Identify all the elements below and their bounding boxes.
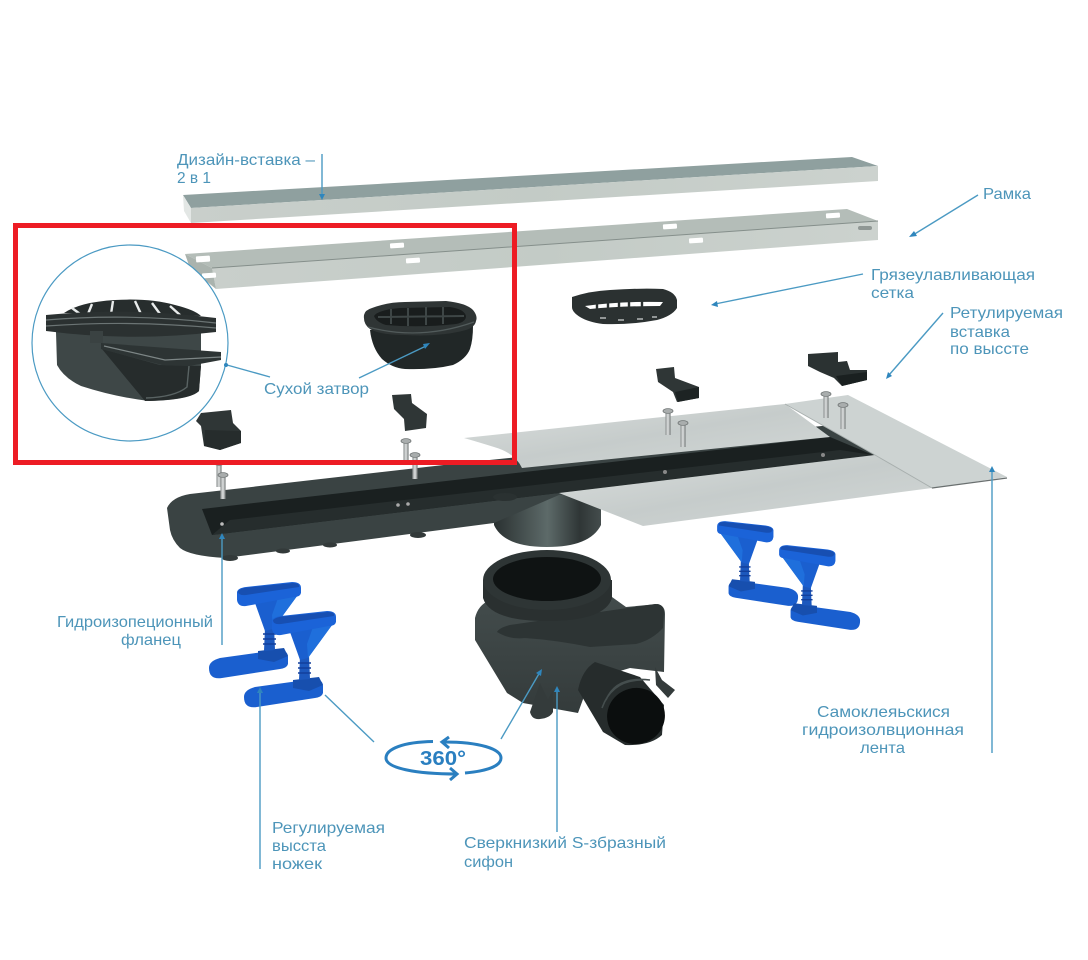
label: height-adjustable insert: Ретулируемая xyxy=(950,305,1063,322)
arrow: sealing flange xyxy=(219,533,225,645)
label: mesh: сетка xyxy=(871,285,914,302)
part: adjustable clip, far right xyxy=(808,352,867,386)
part: dry seal xyxy=(364,301,477,369)
arrow: mesh xyxy=(711,274,863,307)
label: sealing flange: Гидроизопеционный xyxy=(57,614,213,631)
line: foot to 360 icon xyxy=(325,695,374,742)
label: sealing flange: фланец xyxy=(121,632,181,649)
label: mesh xyxy=(871,267,1035,302)
label: S-shaped siphon xyxy=(464,835,666,871)
label: self-adhesive tape: гидроизолвционная xyxy=(802,722,964,739)
label: height-adjustable insert xyxy=(950,305,1063,358)
label: self-adhesive tape xyxy=(802,704,964,757)
arrow: frame xyxy=(909,195,978,237)
part: clip, left xyxy=(196,410,241,450)
label: design insert xyxy=(177,152,315,187)
part: low S-shaped siphon xyxy=(475,550,675,751)
part: sealing flange xyxy=(167,420,880,561)
part: dry seal magnified xyxy=(46,300,221,401)
line: dry seal to magnified circle xyxy=(224,363,270,377)
red highlight frame xyxy=(16,226,514,462)
arrow: rotation to siphon xyxy=(501,669,542,739)
part: design insert bar xyxy=(183,157,878,223)
label: adjustable leg height xyxy=(272,820,385,873)
icon: 360 degree rotation: 360° xyxy=(420,748,466,770)
label: design insert: 2 в 1 xyxy=(177,170,211,187)
label: height-adjustable insert: по выссте xyxy=(950,341,1029,358)
label: frame: Рамка xyxy=(983,186,1031,203)
arrow: dry seal xyxy=(359,343,430,378)
label: dry seal: Сухой затвор xyxy=(264,381,369,398)
arrow: self-adhesive tape xyxy=(989,466,995,753)
arrow: height-adjustable insert xyxy=(886,313,943,379)
part: frame xyxy=(185,209,878,289)
part: adjustable clip, right centre xyxy=(656,367,699,402)
label: self-adhesive tape: лента xyxy=(860,740,905,757)
label: height-adjustable insert: вставка xyxy=(950,324,1010,341)
part: adjustable foot, right back xyxy=(717,521,798,606)
magnified detail circle xyxy=(32,245,228,441)
part: adjustable foot, left front xyxy=(244,611,336,707)
label: mesh: Грязеулавливающая xyxy=(871,267,1035,284)
arrow: S-shaped siphon xyxy=(554,686,560,832)
part: adjustable foot, right front xyxy=(779,545,860,630)
arrow: leg height xyxy=(257,687,263,869)
part: dirt-catching mesh xyxy=(572,289,677,324)
part: adjustable foot, left back xyxy=(209,582,301,678)
icon: 360 degree rotation xyxy=(386,737,501,780)
part: self-adhesive sealing tape xyxy=(464,395,1007,526)
label: design insert: Дизайн-вставка – xyxy=(177,152,315,169)
label: self-adhesive tape: Самоклеяьскися xyxy=(817,704,950,721)
arrow: design insert xyxy=(319,154,325,200)
label: adjustable leg height: ножек xyxy=(272,856,323,873)
part: drain pipe under flange xyxy=(494,490,601,547)
label: adjustable leg height: высста xyxy=(272,838,326,855)
part: screws xyxy=(214,392,848,499)
part: clip, centre xyxy=(392,394,427,431)
label: sealing flange xyxy=(57,614,213,649)
label: S-shaped siphon: Сверкнизкий S-збразный xyxy=(464,835,666,852)
label: S-shaped siphon: сифон xyxy=(464,854,513,871)
label: adjustable leg height: Регулируемая xyxy=(272,820,385,837)
